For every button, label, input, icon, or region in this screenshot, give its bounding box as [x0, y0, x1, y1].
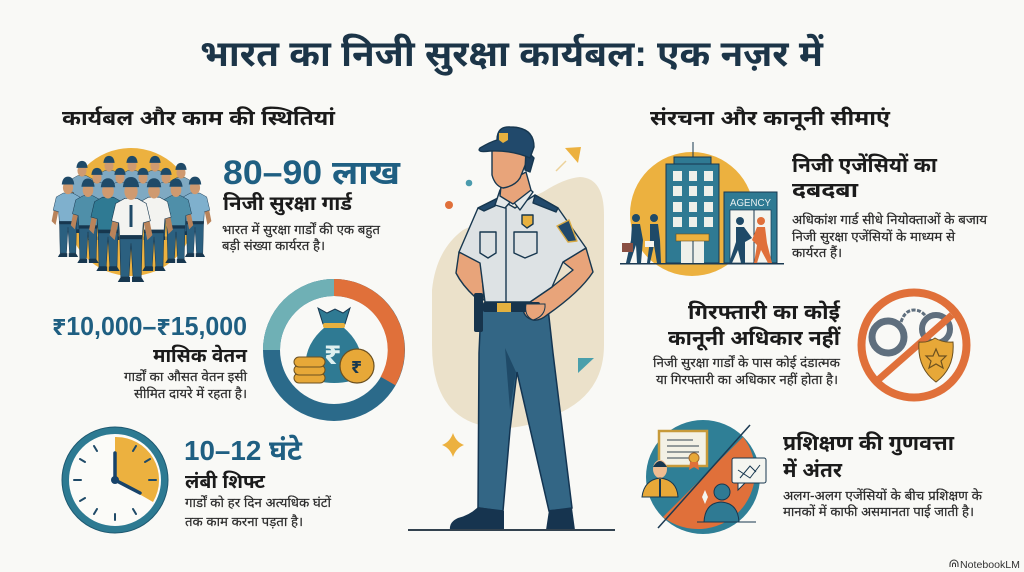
icon: donut with money bag: ₹ [351, 357, 362, 378]
description: निजी सुरक्षा एजेंसियों के माध्यम से [792, 229, 955, 245]
description: अधिकांश गार्ड सीधे नियोक्ताओं के बजाय [792, 212, 987, 227]
watermark: NotebookLM: NotebookLM [960, 560, 1020, 571]
stat: 80-90 lakh: 80–90 लाख [223, 154, 401, 192]
heading: gap in training quality: में अंतर [783, 458, 843, 482]
ground line [408, 529, 615, 531]
description [653, 355, 841, 387]
description [792, 212, 987, 260]
icon: agency building: AGENCY [730, 198, 771, 209]
guard: belt and holster [474, 293, 545, 332]
stat: salary range: ₹10,000–₹15,000 [52, 311, 247, 341]
panel: monthly salary [52, 288, 396, 412]
beige backdrop blob [432, 177, 604, 428]
decorative accents [442, 147, 594, 457]
guard: arms [456, 248, 593, 320]
description: तक काम करना पड़ता है। [185, 514, 303, 529]
description: कार्यरत हैं। [792, 245, 842, 260]
description: मानकों में काफी असमानता पाई जाती है। [783, 504, 974, 519]
heading: workforce and working conditions: कार्यबल और काम की स्थितियां [62, 106, 336, 130]
description: या गिरफ्तारी का अधिकार नहीं होता है। [656, 372, 838, 387]
label: private security guards: निजी सुरक्षा गार्ड [223, 191, 353, 216]
description: बड़ी संख्या कार्यरत है। [222, 238, 325, 253]
title: भारत का निजी सुरक्षा कार्यबल: एक नज़र में [200, 33, 824, 76]
panel: long shift [62, 427, 332, 533]
label: long shift: लंबी शिफ्ट [185, 471, 266, 493]
guard: legs and shoes [450, 308, 575, 530]
panel: training quality gap [642, 420, 983, 534]
guard: shirt [459, 186, 586, 302]
icon: group of guards [52, 148, 211, 282]
description: सीमित दायरे में रहता है। [134, 386, 247, 401]
stat: 10-12 hours: 10–12 घंटे [184, 433, 303, 466]
label: monthly salary: मासिक वेतन [153, 344, 247, 367]
panel: guard count [52, 148, 401, 282]
icon: clock [62, 427, 168, 533]
description: गार्डों का औसत वेतन इसी [124, 369, 248, 384]
description [222, 222, 381, 253]
icon: certificate versus confusion [642, 420, 766, 534]
description [124, 369, 248, 401]
heading: gap in training quality: प्रशिक्षण की गुणवत्ता [783, 431, 955, 456]
heading: gap in training quality [783, 431, 955, 482]
icon: donut with money bag [272, 288, 396, 412]
description [783, 488, 983, 519]
description: निजी सुरक्षा गार्डों के पास कोई दंडात्मक [653, 355, 841, 371]
description: गार्डों को हर दिन अत्यधिक घंटों [185, 495, 332, 510]
icon: agency building [620, 142, 784, 276]
heading: dominance of private agencies: दबदबा [792, 179, 859, 202]
panel: dominance of private agencies [620, 142, 987, 276]
panel: no legal arrest authority [653, 292, 966, 398]
guard: head and cap [479, 127, 534, 204]
description: भारत में सुरक्षा गार्डों की एक बहुत [222, 222, 381, 239]
description: अलग-अलग एजेंसियों के बीच प्रशिक्षण के [783, 488, 983, 503]
heading: no legal right of arrest: गिरफ्तारी का कोई [688, 300, 841, 324]
heading: dominance of private agencies [792, 153, 938, 202]
panel: central guard illustration [408, 127, 615, 531]
heading: no legal right of arrest [668, 300, 842, 351]
icon: donut with money bag: ₹ [324, 338, 341, 371]
heading: structure and legal limits: संरचना और कानूनी सीमाएं [650, 106, 891, 131]
description [185, 495, 332, 529]
heading: dominance of private agencies: निजी एजेंसियों का [792, 153, 938, 177]
icon: prohibited handcuffs and badge [862, 292, 966, 398]
heading: no legal right of arrest: कानूनी अधिकार नहीं [668, 326, 842, 351]
